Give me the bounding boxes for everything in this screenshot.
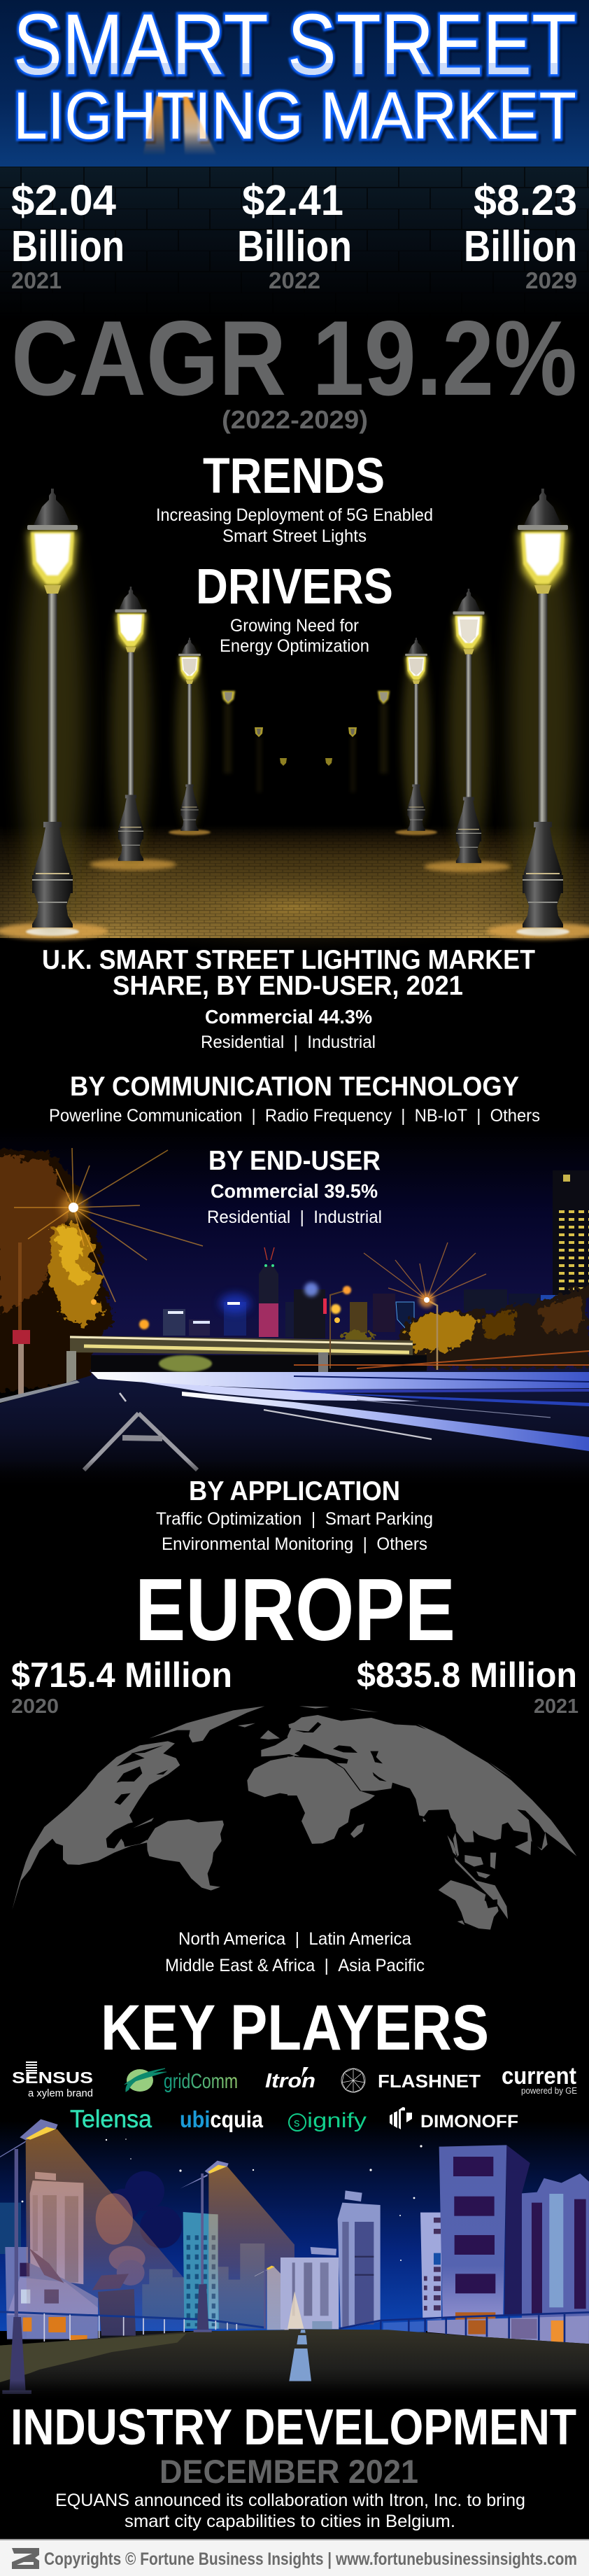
lamp: left mid [111,587,151,862]
stat: 2021: Billion [11,223,125,271]
starburst left [14,1148,203,1302]
logo: gridComm: gridComm [164,2070,238,2093]
road right [289,2329,589,2401]
africa west [247,1756,294,1797]
heading: key players: KEY PLAYERS [101,1992,489,2064]
rubble [5,2247,98,2339]
heading: Europe: EUROPE [135,1560,455,1659]
logo: gridComm [125,2068,238,2093]
logo: Itron: Itron [265,2070,315,2092]
railing [0,2312,266,2328]
heading: by end-user: BY END-USER [208,1146,381,1176]
logo: Dimonoff: DIMONOFF [420,2112,518,2132]
text: development detail: smart city capabilities to cities in Belgium. [125,2512,455,2531]
text: date: DECEMBER 2021 [159,2453,418,2490]
right half [281,2145,589,2401]
left half [0,2119,299,2401]
text: application segments: Traffic Optimization | Smart Parking [156,1509,433,1529]
south america [147,1819,224,1891]
stat: 2022: 2022 [269,267,320,293]
stat: 2029: $8.23 [474,176,577,224]
heading: UK share [42,945,535,1001]
stat: 2021: 2021 [11,267,62,293]
heading: title [13,0,576,153]
greenland [149,1706,264,1742]
stat: 2022 [237,176,352,293]
islands [447,1833,508,1919]
panel: city night photo [0,1127,589,1488]
heading: by communication technology: BY COMMUNICATION TECHNOLOGY [70,1072,519,1102]
sri lanka [423,1818,426,1822]
eurasia [288,1715,576,1856]
overpass [66,1336,427,1386]
heading glow: title outline [13,0,576,153]
lamp 3 [255,2269,268,2276]
lit building right [285,2258,299,2330]
heading: UK share: U.K. SMART STREET LIGHTING MARKET [42,945,535,975]
right trees [340,1284,589,1368]
seas [294,1722,545,1849]
dash [289,2361,294,2381]
text: drivers detail: Energy Optimization [220,636,369,656]
text: application segments: Environmental Monitoring | Others [162,1534,427,1554]
arctic slivers [299,1706,511,1777]
background blocks [142,2269,184,2319]
fire [23,2318,31,2332]
narrow building [420,2213,441,2319]
lamp 2 [180,2174,208,2189]
far right building [522,2174,589,2318]
stat: 2029: 2029 [525,267,577,293]
text: development detail [55,2491,525,2531]
text: other regions [165,1929,425,1975]
africa east [288,1756,375,1844]
stat: 2021 [11,176,125,293]
road left [0,2330,294,2401]
text: drivers detail [220,616,369,656]
dark tree [107,2171,182,2248]
heading: trends: TRENDS [203,449,385,504]
logo: signify: ignify [307,2109,367,2132]
icon: footer logo [12,2548,39,2569]
text: other regions: Middle East & Africa | Asia Pacific [165,1956,425,1975]
mid building [338,2203,381,2329]
heading: UK share: SHARE, BY END-USER, 2021 [113,971,463,1001]
panel: cartoon city scene [0,2119,589,2402]
text: trends detail [156,505,433,546]
lane markings [84,1393,551,1470]
ground [0,825,589,952]
text: communication segments: Powerline Communication | Radio Frequency | NB-IoT | Others [49,1106,540,1126]
text: trends detail: Smart Street Lights [222,526,367,546]
icon: lamp light beams [143,94,217,155]
stat: 2022: $2.41 [242,176,343,224]
map right hemisphere [288,1706,576,1930]
logo: Dimonoff [390,2107,518,2132]
teal building [183,2212,219,2329]
stat: 2021: $2.04 [11,176,116,224]
cone 1 [26,2129,184,2338]
text: commercial share: Commercial 39.5% [211,1180,378,1202]
logo: signify: s [294,2116,299,2129]
railing panels [383,2321,425,2332]
stat: Europe 2021: $835.8 Million [357,1656,577,1695]
text: development detail: EQUANS announced its collaboration with Itron, Inc. to bring [55,2491,525,2510]
text: end-user segments: Residential | Industrial [207,1208,382,1227]
stat: 2022: Billion [237,223,352,271]
panel: street lamps scene [0,489,589,952]
madagascar [350,1823,364,1838]
lamp: right near [511,489,575,930]
lamps: far small [222,691,390,792]
text: trends detail: Increasing Deployment of 5G Enabled [156,505,433,525]
logo: Flashnet: FLASHNET [378,2071,481,2092]
light trails [91,1372,589,1451]
lamp: left near [20,489,85,930]
stat: Europe 2020: $715.4 Million [11,1656,232,1695]
orange trail [294,1351,589,1368]
road [0,1368,589,1488]
panel: header neon title [0,0,589,321]
big building [504,2145,530,2315]
CAGR: (2022-2029) [222,405,368,434]
stat: Europe 2021 [357,1656,579,1718]
logo: current: powered by GE [521,2086,577,2096]
cone 3 [267,2267,294,2330]
heading shadow: title [15,0,579,156]
stat: 2029 [464,176,577,293]
text: UK other segments: Residential | Industrial [201,1032,376,1052]
road dash [289,2330,311,2381]
logo: sensus: a xylem brand [28,2087,93,2099]
lamp: right mid [448,589,489,864]
logo: sensus: SENSUS [12,2068,93,2087]
logo: Flashnet [341,2068,481,2092]
stat: Europe 2021: 2021 [534,1695,579,1718]
lamp: left mid-far [176,638,204,832]
stars [22,2138,423,2261]
stat: Europe 2020: 2020 [11,1695,59,1718]
left trees [0,1148,115,1407]
north america [12,1741,180,1910]
lamp: right mid-far [402,638,430,832]
lamp 1 [0,2141,26,2157]
footer [0,2539,589,2576]
stat: Europe 2020 [11,1656,232,1718]
logo: sensus [12,2062,93,2099]
australia [439,1880,499,1930]
logo: ubicquia: ubicquia [180,2106,264,2132]
street lights [91,1242,486,1370]
cone 2 [208,2166,294,2330]
text: drivers detail: Growing Need for [230,616,359,636]
world map [12,1706,576,1930]
low building [281,2258,339,2329]
logo: signify [289,2109,367,2132]
white building [30,2180,83,2284]
text: other regions: North America | Latin America [178,1929,411,1949]
logo: Telensa: Telensa [70,2106,152,2133]
uk and europe west [260,1730,280,1740]
heading: by application: BY APPLICATION [189,1476,400,1506]
map left hemisphere [12,1706,294,1910]
skyline [163,1170,589,1338]
text: UK commercial share: Commercial 44.3% [205,1006,372,1028]
heading: drivers: DRIVERS [196,559,393,615]
smoke [96,2193,133,2245]
text: application segments [156,1509,433,1554]
logo: current: current [502,2063,576,2090]
